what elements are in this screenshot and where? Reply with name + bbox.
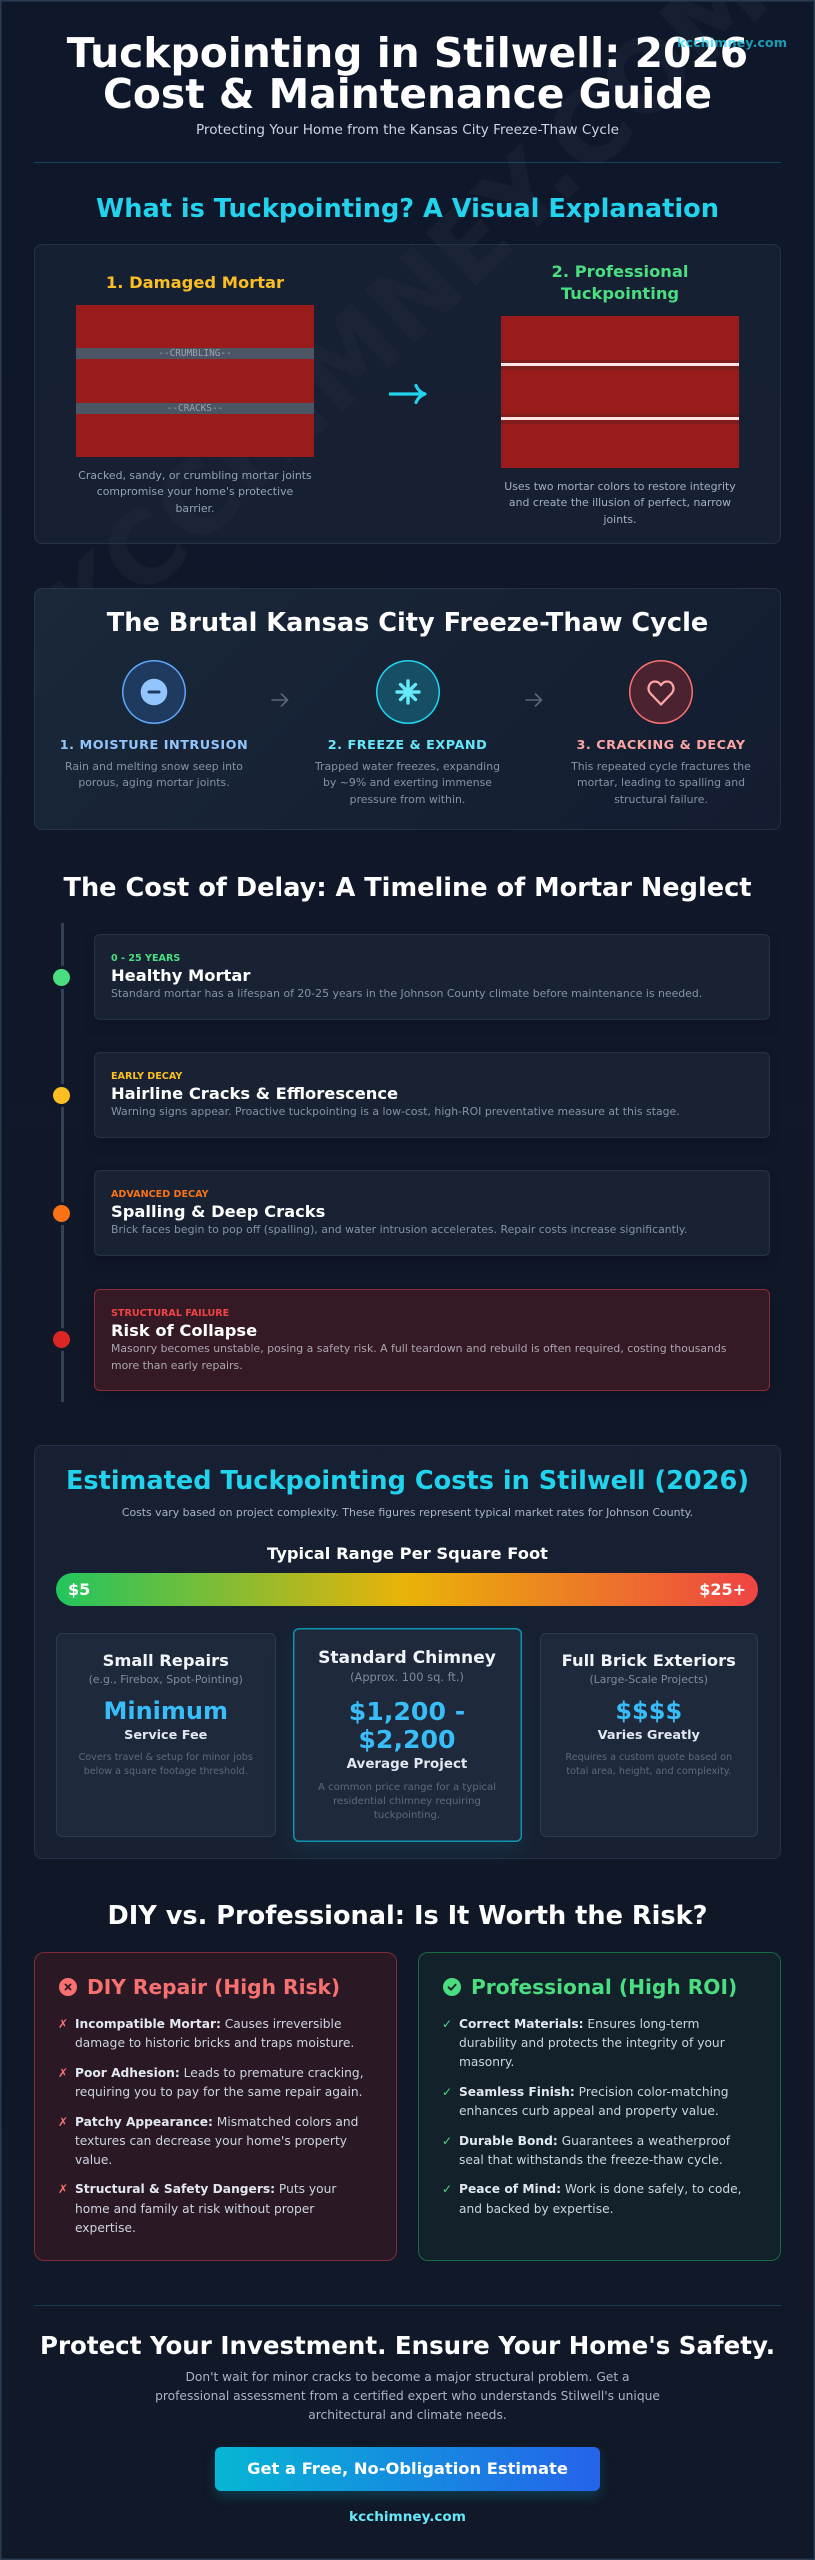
card note [565,1752,732,1777]
heading: DIY vs professional: DIY vs. Professional: Is It Worth the Risk? [108,1901,707,1931]
caption: professional tuckpointing [504,480,736,526]
item: durable bond [442,2134,730,2167]
label: 1. MOISTURE INTRUSION [60,738,248,752]
stage description: Standard mortar has a lifespan of 20-25 years in the Johnson County climate before maintenance is needed. [111,987,702,1000]
item: correct materials: masonry. [459,2055,514,2069]
card title: Full Brick Exteriors [562,1651,736,1670]
panel: professional: ✓ [442,2017,452,2031]
item: peace of mind [442,2182,742,2216]
card title: Standard Chimney [318,1648,496,1668]
price: $$$$ [615,1697,682,1725]
low value: $5 [68,1580,90,1599]
caption: professional tuckpointing: joints. [604,513,636,526]
cost card: full brick exteriors [540,1633,758,1837]
item: incompatible mortar [58,2017,354,2050]
description: Trapped water freezes, expanding [315,760,500,773]
card note: below a square footage threshold. [84,1766,248,1777]
stage label: ADVANCED DECAY [111,1188,209,1200]
caption: damaged mortar [78,469,312,515]
stage description [111,1342,727,1372]
stage title: Healthy Mortar [111,966,250,985]
title: Cost & Maintenance Guide [103,70,712,118]
price: Minimum [103,1697,228,1725]
stage title: Spalling & Deep Cracks [111,1202,325,1221]
description: pressure from within. [350,793,465,806]
card note: tuckpointing. [374,1810,440,1821]
heading: professional tuckpointing [551,262,689,303]
subtitle: Protecting Your Home from the Kansas City Freeze-Thaw Cycle [196,122,619,138]
card note: A common price range for a typical [318,1782,496,1793]
caption: damaged mortar: compromise your home's protective [97,485,293,498]
caption: professional tuckpointing: and create the illusion of perfect, narrow [509,496,731,509]
button: estimate: Get a Free, No-Obligation Estimate [247,2459,568,2478]
item: correct materials: Correct Materials: Ensures long-term [459,2017,699,2031]
panel: visual explanation [34,244,781,544]
card subtitle: (e.g., Firebox, Spot-Pointing) [89,1673,243,1686]
heading: damaged mortar: 1. Damaged Mortar [106,273,284,292]
price label: Service Fee [124,1728,207,1743]
panel heading: DIY Repair (High Risk) [87,1975,340,1999]
repaired joint lower [501,414,739,424]
timeline axis [61,923,64,1402]
timeline card: risk of collapse [94,1289,770,1391]
heading: professional tuckpointing: 2. Professional [551,262,689,281]
icon: heart crack [629,660,693,724]
arrow: step 2 to 3 [525,693,542,707]
repaired joint upper [501,360,739,370]
item: seamless finish: enhances curb appeal and property value. [459,2104,719,2118]
step 3: cracking and decay [571,660,751,806]
card note: Covers travel & setup for minor jobs [79,1752,253,1763]
card note: residential chimney requiring [333,1796,481,1807]
benefit list [442,2017,742,2216]
button: estimate [215,2447,600,2491]
timeline card: spalling [94,1170,770,1256]
item: seamless finish [442,2085,729,2118]
call to action text: Don't wait for minor cracks to become a major structural problem. Get a [185,2370,630,2384]
panel: professional [418,1952,781,2261]
panel heading: Professional (High ROI) [471,1975,737,1999]
card note [318,1782,496,1821]
item: correct materials [442,2017,725,2069]
cost card: small repairs [56,1633,276,1837]
stage description: Brick faces begin to pop off (spalling), and water intrusion accelerates. Repair costs increase significantly. [111,1223,687,1236]
item: poor adhesion [58,2066,364,2099]
heading: what is tuckpointing: What is Tuckpointing? A Visual Explanation [96,194,719,224]
description [65,760,243,789]
item: poor adhesion: requiring you to pay for the same repair again. [75,2085,363,2099]
panel: freeze-thaw cycle [34,588,781,830]
heading: professional tuckpointing: Tuckpointing [561,284,679,303]
description: mortar, leading to spalling and [577,776,745,789]
panel: professional: ✓ [442,2182,452,2196]
price: $2,200 [358,1725,456,1754]
arrow: step 1 to 2 [271,693,288,707]
call to action text: architectural and climate needs. [308,2408,507,2422]
stage description: Masonry becomes unstable, posing a safety risk. A full teardown and rebuild is often required, costing thousands [111,1342,727,1355]
caption: professional tuckpointing: Uses two mortar colors to restore integrity [504,480,736,493]
heading: timeline: The Cost of Delay: A Timeline of Mortar Neglect [64,873,752,903]
description: structural failure. [614,793,708,806]
step 2: freeze and expand [315,660,500,806]
call to action text [155,2370,660,2422]
cracked mortar joint: --CRACKS-- [167,403,223,414]
description: by ~9% and exerting immense [323,776,492,789]
timeline dot: advanced decay [53,1204,70,1222]
item: durable bond: seal that withstands the freeze-thaw cycle. [459,2153,723,2167]
card note [79,1752,253,1777]
item: seamless finish: Seamless Finish: Precision color-matching [459,2085,729,2099]
item: durable bond: Durable Bond: Guarantees a weatherproof [459,2134,730,2148]
step 1: moisture intrusion [60,660,248,789]
panel: professional: ✓ [442,2134,452,2148]
heading: freeze-thaw cycle: The Brutal Kansas City Freeze-Thaw Cycle [107,608,708,638]
caption: damaged mortar: Cracked, sandy, or crumbling mortar joints [78,469,312,482]
item: safety dangers [58,2182,336,2235]
description: Rain and melting snow seep into [65,760,243,773]
panel: DIY repair: ✗ [58,2115,68,2129]
item: patchy appearance: value. [75,2153,112,2167]
card note: Requires a custom quote based on [565,1752,732,1763]
panel: DIY repair [34,1952,397,2261]
icon: x circle [59,1978,77,1996]
card note: total area, height, and complexity. [566,1766,731,1777]
item: incompatible mortar: damage to historic bricks and traps moisture. [75,2036,354,2050]
stage title: Hairline Cracks & Efflorescence [111,1084,398,1103]
heading: costs: Estimated Tuckpointing Costs in Stilwell (2026) [66,1466,749,1496]
heading: call to action: Protect Your Investment. Ensure Your Home's Safety. [40,2331,775,2360]
illustration: repaired brick wall [501,316,739,468]
item: patchy appearance: Patchy Appearance: Mismatched colors and [75,2115,358,2129]
stage label: 0 - 25 YEARS [111,952,180,964]
panel: DIY repair: ✗ [58,2182,68,2196]
label: 3. CRACKING & DECAY [577,738,745,752]
price: $1,200 - [349,1697,465,1726]
item: incompatible mortar: Incompatible Mortar: Causes irreversible [75,2017,342,2031]
panel: DIY repair: ✗ [58,2066,68,2080]
top-right site label: kcchimney.com [677,36,787,51]
cost card: standard chimney [292,1628,522,1842]
icon: snowflake [376,660,440,724]
item: safety dangers: home and family at risk without proper [75,2202,314,2216]
footer link: kcchimney.com [349,2509,466,2525]
item: safety dangers: Structural & Safety Dangers: Puts your [75,2182,336,2196]
item: peace of mind: and backed by expertise. [459,2202,613,2216]
description: porous, aging mortar joints. [78,776,230,789]
caption: damaged mortar: barrier. [176,502,214,515]
card subtitle: (Large-Scale Projects) [589,1673,708,1686]
panel: costs [34,1445,781,1859]
title: Tuckpointing in Stilwell: 2026 [67,29,748,77]
item: poor adhesion: Poor Adhesion: Leads to premature cracking, [75,2066,364,2080]
high value: $25+ [699,1580,746,1599]
illustration: damaged brick wall [76,305,314,457]
crumbling mortar joint [76,348,314,359]
card title: Small Repairs [103,1651,229,1670]
item: peace of mind: Peace of Mind: Work is done safely, to code, [459,2182,742,2196]
cracked mortar joint [76,403,314,414]
item: safety dangers: expertise. [75,2221,136,2235]
icon: water [122,660,186,724]
stage description: more than early repairs. [111,1358,243,1372]
crumbling mortar joint: --CRUMBLING-- [158,348,232,359]
arrow: before to after [389,384,427,404]
price [349,1697,465,1754]
stage label: STRUCTURAL FAILURE [111,1308,229,1318]
item: patchy appearance [58,2115,358,2167]
call to action text: professional assessment from a certified expert who understands Stilwell's unique [155,2389,660,2403]
panel: DIY repair: ✗ [58,2017,68,2031]
stage description: Warning signs appear. Proactive tuckpointing is a low-cost, high-ROI preventative measure at this stage. [111,1105,680,1118]
timeline dot: early decay [53,1087,70,1104]
price label: Average Project [347,1757,467,1772]
timeline dot: healthy [53,968,70,986]
description: This repeated cycle fractures the [571,760,751,773]
card subtitle: (Approx. 100 sq. ft.) [350,1670,464,1684]
price label: Varies Greatly [598,1728,700,1743]
timeline dot: structural failure [53,1331,70,1348]
description [571,760,751,806]
timeline card: hairline cracks [94,1052,770,1138]
stage title: Risk of Collapse [111,1321,257,1340]
subheading: range: Typical Range Per Square Foot [267,1544,548,1563]
title [66,29,748,118]
item: patchy appearance: textures can decrease your home's property [75,2134,347,2148]
gradient range bar [56,1573,758,1606]
panel: professional: ✓ [442,2085,452,2099]
label: 2. FREEZE & EXPAND [328,738,487,752]
stage label: EARLY DECAY [111,1070,182,1082]
intro text: Costs vary based on project complexity. These figures represent typical market rates for Johnson County. [122,1506,693,1519]
icon: check circle [443,1978,461,1996]
timeline card: healthy mortar [94,934,770,1020]
description [315,760,500,806]
risk list [58,2017,364,2235]
item: correct materials: durability and protects the integrity of your [459,2036,725,2050]
